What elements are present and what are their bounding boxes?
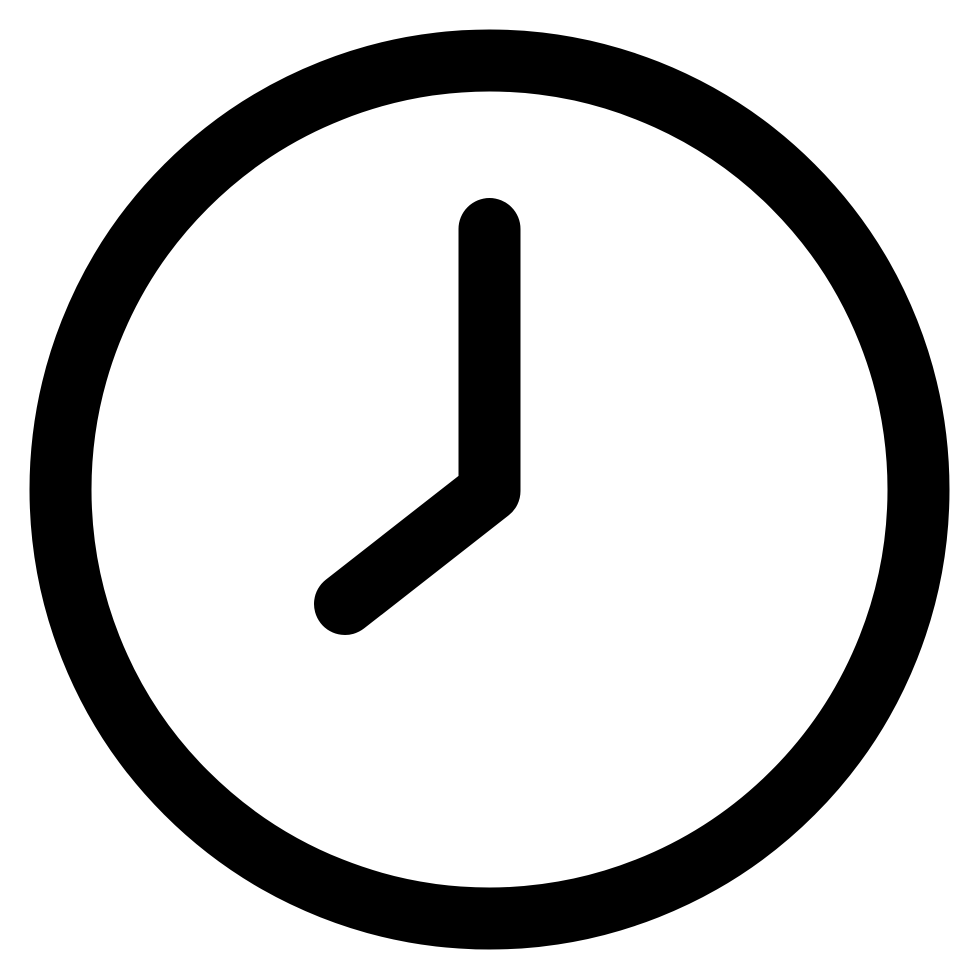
clock face outline (60, 60, 918, 918)
clock hands (345, 229, 490, 604)
